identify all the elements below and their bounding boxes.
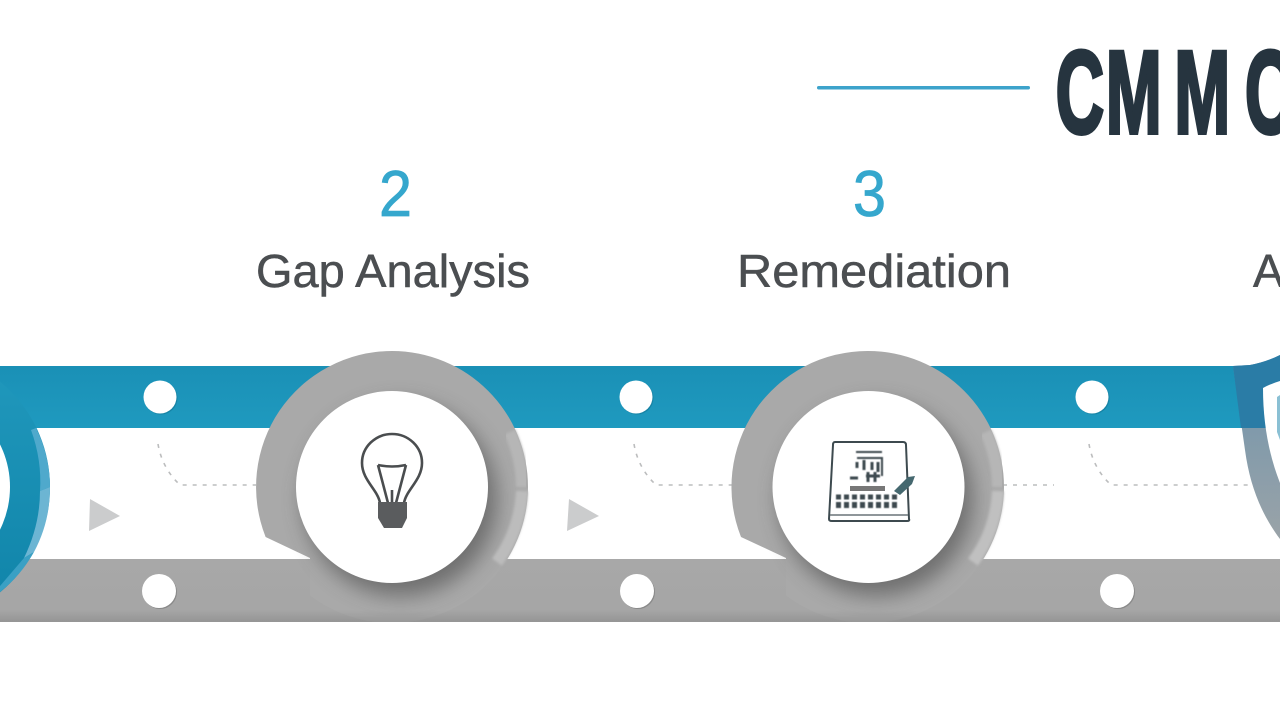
step 3 circle — [731, 351, 1004, 623]
gray band lower edge — [0, 610, 1280, 626]
step 1 circle — [0, 351, 50, 623]
bottom gray band — [0, 559, 1280, 622]
accent line — [817, 86, 1030, 90]
step 3 number: 3 — [853, 157, 886, 230]
step 2 number: 2 — [379, 157, 412, 230]
icon: light bulb — [362, 434, 422, 528]
arrow 1 — [89, 499, 120, 531]
dashed connector 1 — [158, 444, 256, 485]
top blue band — [0, 366, 1280, 428]
dashed connector 3 — [1089, 444, 1254, 485]
dashed connector 2 — [634, 444, 734, 485]
gray band dots — [142, 574, 1135, 609]
arrow 2 — [567, 499, 599, 531]
step 3 label: Remediation — [737, 245, 1011, 297]
step 2 label: Gap Analysis — [256, 245, 530, 297]
step 2 circle — [256, 351, 528, 623]
blue band dots — [144, 380, 1110, 414]
dashed connector stub after step 3 — [1003, 484, 1054, 486]
step 4 shield — [1233, 355, 1280, 539]
icon: keyboard tablet — [829, 442, 915, 521]
